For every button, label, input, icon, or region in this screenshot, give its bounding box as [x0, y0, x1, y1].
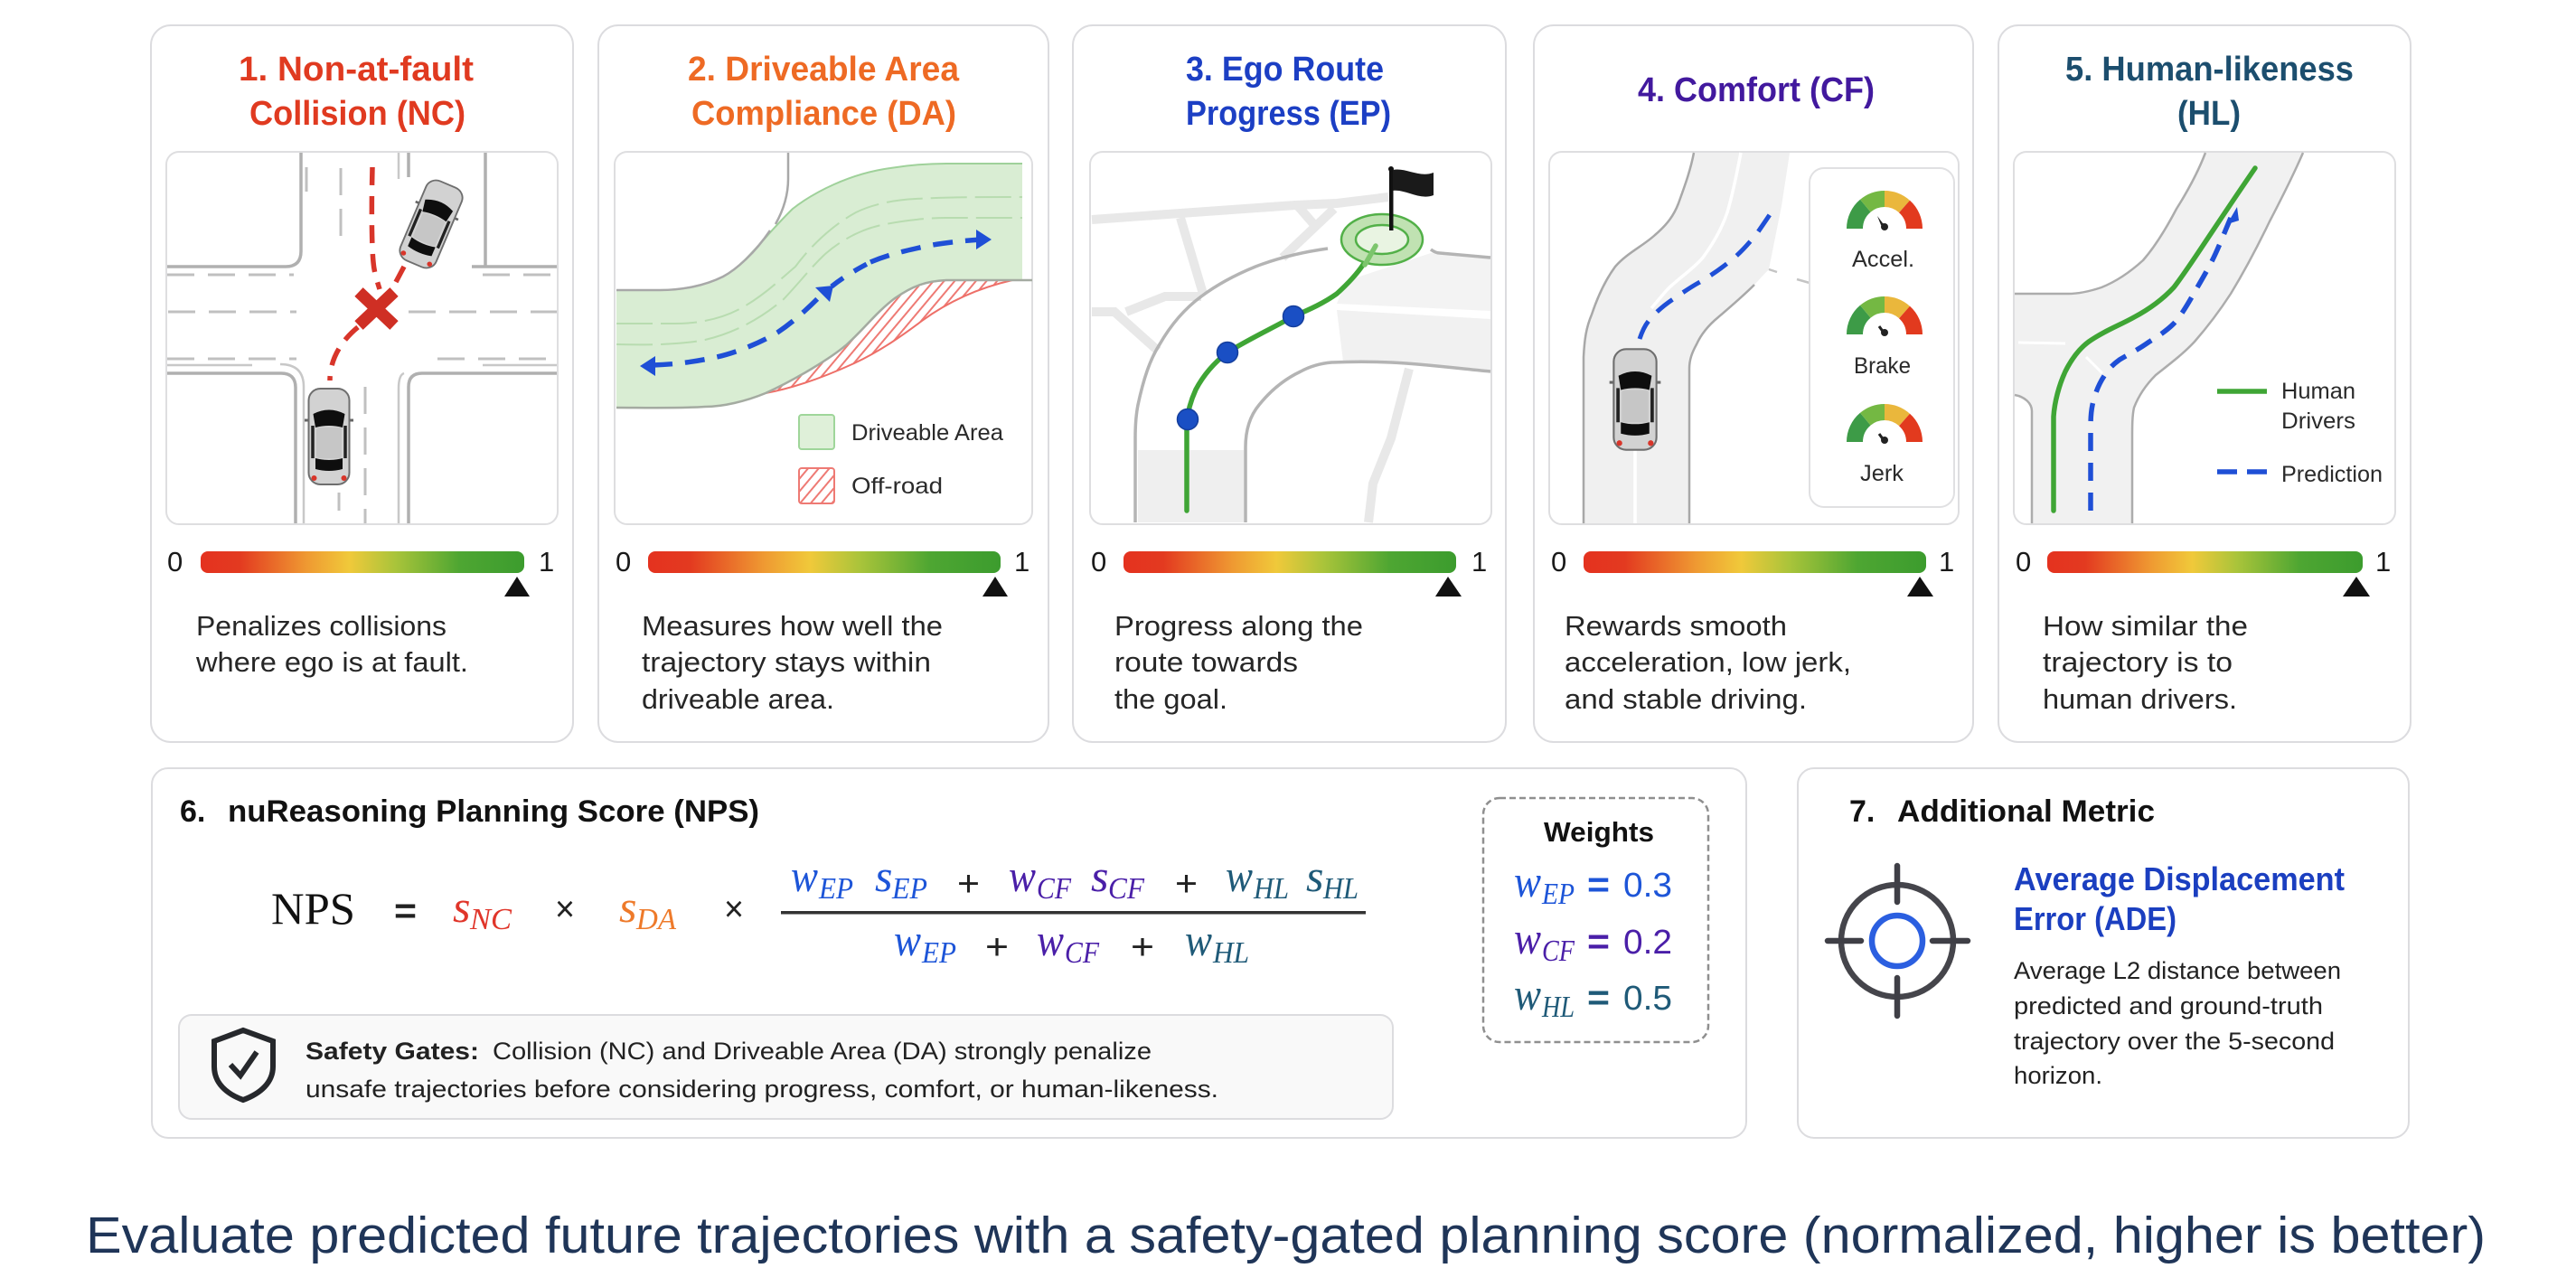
weight CF: =: [1587, 922, 1610, 962]
icon: car: [1610, 349, 1660, 450]
heading: non-at-fault collision: 1. Non-at-fault: [239, 51, 474, 89]
panel: 2 driveable area compliance: [598, 25, 1048, 742]
weight EP: EP: [1541, 878, 1575, 911]
heading: driveable area compliance: 2. Driveable Area: [688, 51, 960, 89]
score bar: 1: [539, 546, 554, 578]
illustration: route map: [1090, 152, 1491, 524]
denominator: +: [1131, 927, 1154, 967]
weight EP: w: [1514, 856, 1541, 907]
panel: 5 human-likeness: [1998, 25, 2411, 742]
illustration: smooth road with gauges: [1549, 152, 1959, 524]
heading: planning score: nuReasoning Planning Score (NPS): [228, 794, 759, 829]
text: safety note: unsafe trajectories before considering progress, comfort, or human-likeness.: [306, 1076, 1218, 1103]
gauge: jerk: [1855, 412, 1914, 486]
numerator: +: [957, 864, 980, 904]
denominator: w: [894, 915, 921, 965]
icon: flag: [1388, 166, 1434, 230]
panel: 4 comfort: [1534, 25, 1973, 742]
denominator: w: [1037, 915, 1064, 965]
denominator: EP: [921, 936, 956, 970]
text: description: route towards: [1114, 646, 1298, 678]
score bar: 0: [1091, 546, 1106, 578]
weight EP: [1514, 856, 1672, 911]
denominator: w: [1185, 915, 1212, 965]
heading: additional metric: 7.: [1849, 794, 1875, 829]
score bar: 1: [1939, 546, 1954, 578]
weight CF: [1514, 913, 1672, 968]
gauge: brake: Brake: [1854, 353, 1911, 379]
heading: human-likeness: (HL): [2177, 95, 2241, 133]
heading: ADE: Error (ADE): [2014, 900, 2176, 937]
trajectory: blue dashed double arrow: [640, 230, 992, 376]
illustration: human vs prediction: [2014, 152, 2395, 524]
score bar: 0: [616, 546, 631, 578]
icon: goal ring: [1341, 214, 1423, 265]
numerator: EP: [818, 872, 853, 906]
illustration: driveable road: [615, 152, 1032, 524]
text: description: trajectory is to: [2043, 646, 2233, 678]
formula: NPS: [271, 883, 355, 934]
score bar: [1551, 546, 1954, 597]
off-road hatch: [766, 280, 1012, 393]
score bar: [2016, 546, 2391, 597]
score bar: 0: [2016, 546, 2031, 578]
icon: target: [1828, 866, 1968, 1016]
text: description: where ego is at fault.: [195, 646, 468, 678]
text: description: human drivers.: [2043, 683, 2237, 715]
denominator: CF: [1065, 936, 1100, 970]
text: ADE description: trajectory over the 5-second: [2014, 1028, 2335, 1055]
legend: Prediction: [2281, 462, 2383, 487]
heading: non-at-fault collision: Collision (NC): [249, 95, 465, 133]
text: ADE description: [2014, 957, 2341, 1089]
gauge: acceleration: Accel.: [1852, 247, 1914, 272]
callout: safety gates: [179, 1015, 1393, 1119]
score bar: [1091, 546, 1487, 597]
gauge: brake: [1854, 305, 1914, 379]
numerator: +: [1175, 864, 1198, 904]
text: safety note: [306, 1038, 1218, 1103]
text: ADE description: horizon.: [2014, 1062, 2102, 1089]
icon: other car: [393, 175, 469, 273]
weight HL: [1514, 969, 1672, 1024]
text: description: [1565, 610, 1851, 715]
text: description: [1114, 610, 1363, 715]
score bar: 1: [2375, 546, 2391, 578]
term: s DA: [619, 881, 676, 936]
text: ADE description: Average L2 distance between: [2014, 957, 2341, 984]
weight HL: HL: [1541, 991, 1575, 1024]
formula: ×: [555, 889, 575, 929]
caption: Evaluate predicted future trajectories with a safety-gated planning score (normalized, higher is better): [86, 1207, 2486, 1264]
text: description: [642, 610, 943, 715]
heading: human-likeness: [2065, 51, 2354, 133]
text: description: Measures how well the: [642, 610, 943, 642]
score bar: 1: [1471, 546, 1487, 578]
weight CF: 0.2: [1623, 924, 1672, 962]
formula: ×: [724, 889, 744, 929]
driveable area band: [616, 164, 1022, 408]
legend: Drivers: [2281, 409, 2355, 434]
numerator: w: [1226, 850, 1253, 901]
panel: weights: [1483, 798, 1708, 1042]
legend: Driveable Area: [851, 420, 1003, 446]
score bar: [616, 546, 1029, 597]
term: s NC: NC: [469, 903, 512, 936]
heading: ego route progress: Progress (EP): [1186, 95, 1391, 133]
score bar: 0: [167, 546, 183, 578]
illustration: intersection collision: [166, 152, 558, 524]
trajectory: green route: [1187, 245, 1377, 511]
text: description: [2043, 610, 2248, 715]
score bar: 1: [1014, 546, 1029, 578]
text: description: How similar the: [2043, 610, 2248, 642]
legend: [799, 415, 1003, 503]
panel: 1 non-at-fault collision: [151, 25, 573, 742]
legend: Off-road: [851, 474, 943, 499]
weight CF: CF: [1542, 935, 1575, 968]
numerator: w: [1009, 850, 1036, 901]
text: description: and stable driving.: [1565, 683, 1807, 715]
numerator: HL: [1253, 872, 1289, 906]
icon: ego car: [305, 389, 353, 484]
trajectory: blue dashed: [1640, 206, 1775, 339]
heading: ADE: Average Displacement: [2014, 860, 2345, 897]
heading: comfort: 4. Comfort (CF): [1638, 71, 1875, 109]
heading: non-at-fault collision: [239, 51, 474, 133]
denominator: +: [985, 927, 1009, 967]
gauge: jerk: Jerk: [1860, 461, 1904, 486]
heading: ADE: [2014, 860, 2345, 937]
term: s NC: s: [453, 881, 470, 932]
formula: =: [394, 891, 417, 931]
heading: ego route progress: 3. Ego Route: [1186, 51, 1384, 89]
numerator: s: [1091, 850, 1108, 901]
weight HL: =: [1587, 978, 1610, 1018]
text: description: Penalizes collisions: [196, 610, 447, 642]
trajectory: red dashed paths: [330, 167, 404, 380]
weight EP: 0.3: [1623, 867, 1672, 905]
panel: weights: Weights: [1544, 816, 1654, 848]
panel: 3 ego route progress: [1073, 25, 1506, 742]
panel: gauges: [1810, 168, 1954, 507]
trajectory: prediction: [2091, 207, 2239, 511]
text: description: [195, 610, 468, 678]
text: description: Rewards smooth: [1565, 610, 1787, 642]
heading: ego route progress: [1186, 51, 1391, 133]
numerator: EP: [891, 872, 927, 906]
legend: [2217, 379, 2383, 487]
text: ADE description: predicted and ground-truth: [2014, 992, 2323, 1019]
panel: 6 nuReasoning planning score: [152, 768, 1746, 1138]
gauge: acceleration: [1852, 199, 1914, 272]
text: safety note: Safety Gates:: [306, 1038, 479, 1065]
trajectory: human driver: [2054, 168, 2255, 511]
numerator: s: [1306, 850, 1323, 901]
text: description: acceleration, low jerk,: [1565, 646, 1851, 678]
text: description: driveable area.: [642, 683, 834, 715]
score bar: 0: [1551, 546, 1566, 578]
heading: human-likeness: 5. Human-likeness: [2065, 51, 2354, 89]
weight EP: =: [1587, 865, 1610, 905]
term: s DA: DA: [635, 903, 676, 936]
denominator: [894, 915, 1249, 970]
waypoints: [1177, 305, 1303, 430]
formula: [271, 850, 1366, 970]
denominator: HL: [1212, 936, 1249, 970]
weight HL: 0.5: [1623, 980, 1672, 1018]
heading: planning score: 6.: [180, 794, 205, 829]
weight HL: w: [1514, 969, 1541, 1019]
heading: additional metric: Additional Metric: [1897, 794, 2155, 829]
term: s NC: [453, 881, 512, 936]
numerator: w: [791, 850, 818, 901]
term: s DA: s: [619, 881, 636, 932]
numerator: [791, 850, 1359, 906]
score bar: [167, 546, 554, 597]
text: description: the goal.: [1114, 683, 1227, 715]
text: description: trajectory stays within: [642, 646, 931, 678]
heading: driveable area compliance: Compliance (DA): [691, 95, 956, 133]
text: safety note: Collision (NC) and Driveable Area (DA) strongly penalize: [493, 1038, 1152, 1065]
icon: collision cross: [359, 292, 394, 325]
numerator: CF: [1108, 872, 1145, 906]
numerator: HL: [1322, 872, 1359, 906]
legend: Human: [2281, 379, 2355, 404]
heading: driveable area compliance: [688, 51, 960, 133]
panel: 7 additional metric: [1798, 768, 2409, 1138]
text: description: Progress along the: [1114, 610, 1363, 642]
icon: shield: [214, 1030, 273, 1100]
numerator: s: [875, 850, 892, 901]
weight CF: w: [1514, 913, 1541, 963]
numerator: CF: [1037, 872, 1072, 906]
